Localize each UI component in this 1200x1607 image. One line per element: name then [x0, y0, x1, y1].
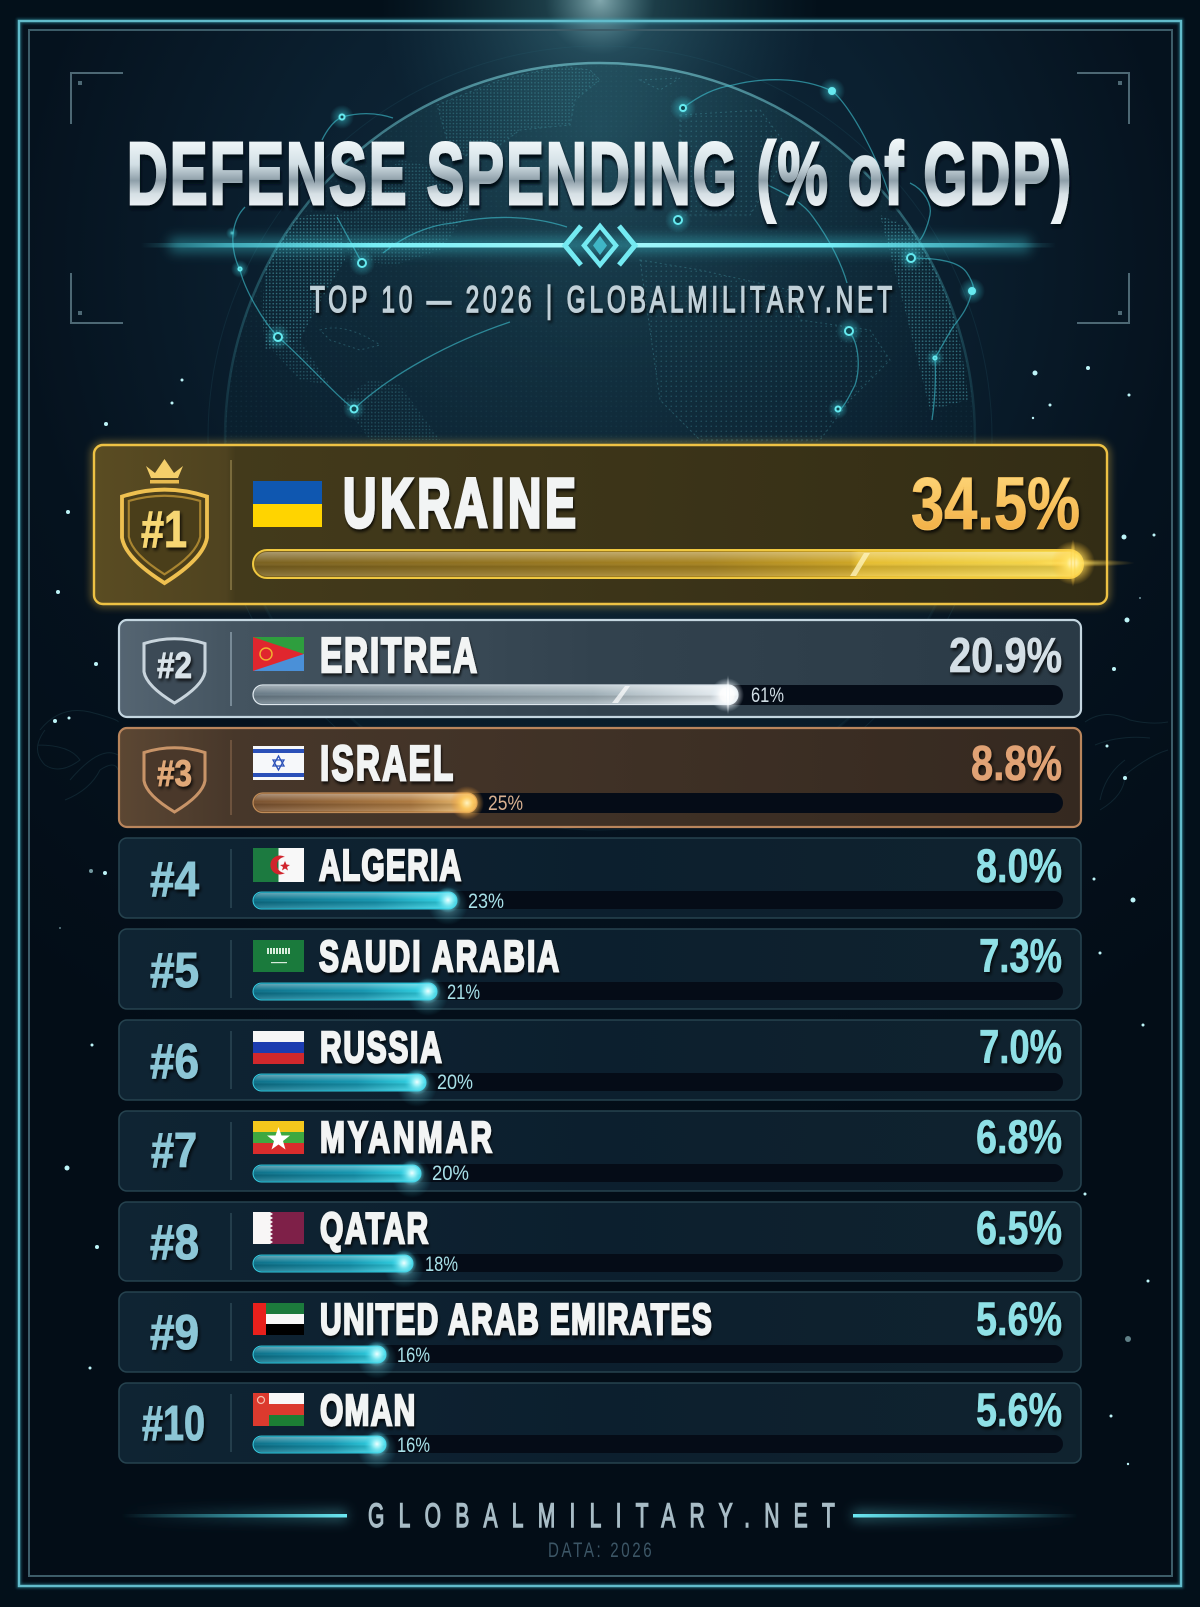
value: 5.6% [976, 1383, 1062, 1436]
panel: rank 1 Ukraine [94, 445, 1135, 604]
title: DEFENSE SPENDING (% of GDP) [127, 124, 1071, 223]
network arcs [233, 80, 974, 420]
country name: MYANMAR [320, 1112, 492, 1161]
flag: Saudi Arabia [253, 940, 304, 972]
network nodes [226, 78, 985, 420]
bar percentage: 16% [397, 1434, 430, 1457]
flag: Myanmar [253, 1121, 304, 1154]
country name: ERITREA [320, 628, 477, 683]
country name: OMAN [320, 1385, 415, 1434]
flag: Oman [253, 1393, 304, 1426]
country name: ISRAEL [320, 736, 453, 791]
flag: Algeria [253, 848, 304, 882]
flag: United Arab Emirates [253, 1303, 304, 1335]
rank badge number: #3 [157, 753, 192, 794]
icon: bronze shield [144, 748, 205, 812]
value: 20.9% [949, 629, 1062, 683]
value: 6.8% [976, 1110, 1062, 1163]
rank number: #4 [150, 853, 199, 907]
rank badge number: #1 [141, 501, 187, 559]
bar percentage: 21% [447, 981, 480, 1004]
footer site name: GLOBALMILITARY.NET [368, 1496, 835, 1534]
rank number: #10 [142, 1397, 205, 1451]
rank number: #6 [150, 1035, 199, 1089]
flag: Israel [253, 746, 304, 780]
panel: rank 6 Russia [119, 1020, 1081, 1107]
bar percentage: 25% [488, 792, 523, 815]
value: 8.8% [971, 737, 1062, 791]
dotted continents [225, 60, 975, 460]
bar percentage: 61% [751, 684, 784, 707]
panel: rank 10 Oman [119, 1383, 1081, 1469]
rank number: #7 [151, 1124, 197, 1178]
value: 34.5% [911, 462, 1080, 545]
globe with network arcs [208, 46, 992, 830]
flag: Ukraine [253, 481, 322, 527]
value: 5.6% [976, 1292, 1062, 1345]
progress track and bar [253, 1158, 1063, 1198]
rank number: #5 [150, 944, 199, 998]
country name: RUSSIA [320, 1022, 442, 1071]
value: 7.0% [979, 1020, 1062, 1073]
flag: Qatar [253, 1212, 304, 1244]
icon: gold shield [122, 490, 207, 583]
footer [122, 1496, 1078, 1562]
progress track and bar [253, 1067, 1063, 1107]
country name: UNITED ARAB EMIRATES [320, 1294, 712, 1343]
panel: rank 4 Algeria [119, 838, 1081, 925]
flag: Eritrea [253, 637, 304, 671]
corner brackets [71, 73, 1129, 323]
bar percentage: 16% [397, 1344, 430, 1367]
country name: SAUDI ARABIA [319, 931, 559, 980]
panel: rank 7 Myanmar [119, 1110, 1081, 1198]
icon: gold crown [146, 459, 183, 484]
value: 8.0% [976, 839, 1062, 892]
bar percentage: 18% [425, 1253, 458, 1276]
background stars [53, 366, 1156, 1465]
country name: UKRAINE [343, 463, 576, 542]
progress track and bar [253, 786, 1063, 820]
progress track and bar [253, 976, 1063, 1016]
progress track and bar [253, 885, 1063, 925]
progress bar [253, 539, 1135, 587]
subtitle: TOP 10 — 2026 | GLOBALMILITARY.NET [310, 279, 892, 320]
bar percentage: 23% [468, 890, 504, 913]
progress track and bar [253, 1429, 1063, 1469]
divider with diamond emblem [141, 226, 1056, 265]
rank number: #9 [150, 1306, 199, 1360]
value: 6.5% [976, 1201, 1062, 1254]
panel: rank 9 United Arab Emirates [119, 1292, 1081, 1379]
value: 7.3% [979, 929, 1062, 982]
flag: Russia [253, 1031, 304, 1064]
rank badge number: #2 [157, 645, 192, 686]
panel: rank 3 Israel [119, 728, 1081, 827]
rank number: #8 [150, 1216, 199, 1270]
country name: ALGERIA [319, 840, 461, 889]
country name: QATAR [320, 1203, 428, 1252]
footer data note: DATA: 2026 [548, 1537, 652, 1562]
icon: silver shield [144, 639, 205, 703]
progress track and bar [253, 675, 1063, 715]
bar percentage: 20% [437, 1071, 473, 1094]
progress track and bar [253, 1339, 1063, 1379]
panel: rank 2 Eritrea [119, 620, 1081, 717]
panel: rank 8 Qatar [119, 1201, 1081, 1288]
panel: rank 5 Saudi Arabia [119, 929, 1081, 1016]
bar percentage: 20% [432, 1162, 469, 1185]
faint map outlines [38, 710, 1168, 810]
progress track and bar [253, 1248, 1063, 1288]
